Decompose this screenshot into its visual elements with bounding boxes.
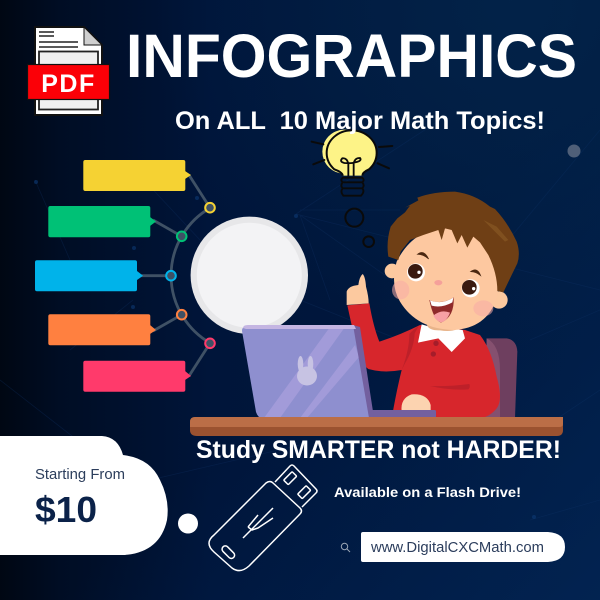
icon: USB flash drive xyxy=(209,465,317,571)
raised hand xyxy=(347,274,369,305)
icon: search xyxy=(341,543,350,552)
website pill xyxy=(361,532,565,562)
website pill: www.DigitalCXCMath.com xyxy=(370,539,544,556)
nose xyxy=(434,280,442,285)
sweater xyxy=(347,303,500,418)
ears xyxy=(385,264,508,309)
neck xyxy=(427,320,459,338)
icon: rabbit logo xyxy=(297,356,317,386)
illustration: boy body xyxy=(347,274,517,418)
eyes and brows xyxy=(407,252,481,297)
chair xyxy=(485,338,517,418)
branch: yellow xyxy=(83,160,215,212)
title: INFOGRAPHICS xyxy=(126,22,577,90)
hair highlight xyxy=(483,220,508,242)
tagline: Study SMARTER not HARDER! xyxy=(196,436,561,464)
centre circle xyxy=(191,217,308,334)
cheeks xyxy=(392,281,493,316)
branch: blue xyxy=(35,260,176,291)
white dot xyxy=(178,514,198,534)
face xyxy=(394,228,498,330)
desk xyxy=(190,417,563,436)
price: $10 xyxy=(35,489,97,530)
grey decorative dot xyxy=(568,144,580,158)
flash drive label: Available on a Flash Drive! xyxy=(334,485,521,500)
illustration: light bulb and thought bubbles xyxy=(312,130,392,247)
resting hand xyxy=(401,394,431,412)
branch: green xyxy=(48,206,186,241)
sweater shading xyxy=(402,326,470,390)
icon: PDF document: PDF xyxy=(41,70,96,98)
illustration: boy head xyxy=(385,192,519,330)
hair xyxy=(388,192,519,292)
subtitle: On ALL 10 Major Math Topics! xyxy=(175,107,545,135)
collar xyxy=(418,324,465,352)
branch: pink xyxy=(83,338,215,392)
laptop base xyxy=(370,410,436,418)
connector arc xyxy=(171,208,210,343)
price label: Starting From xyxy=(35,467,125,483)
branch: orange xyxy=(48,310,186,345)
price cloud xyxy=(0,436,168,555)
icon: PDF document xyxy=(28,27,110,115)
laptop lid xyxy=(242,327,370,418)
infographic diagram xyxy=(35,160,308,392)
mouth xyxy=(429,297,454,323)
illustration: laptop xyxy=(242,325,436,418)
buttons xyxy=(431,341,439,357)
